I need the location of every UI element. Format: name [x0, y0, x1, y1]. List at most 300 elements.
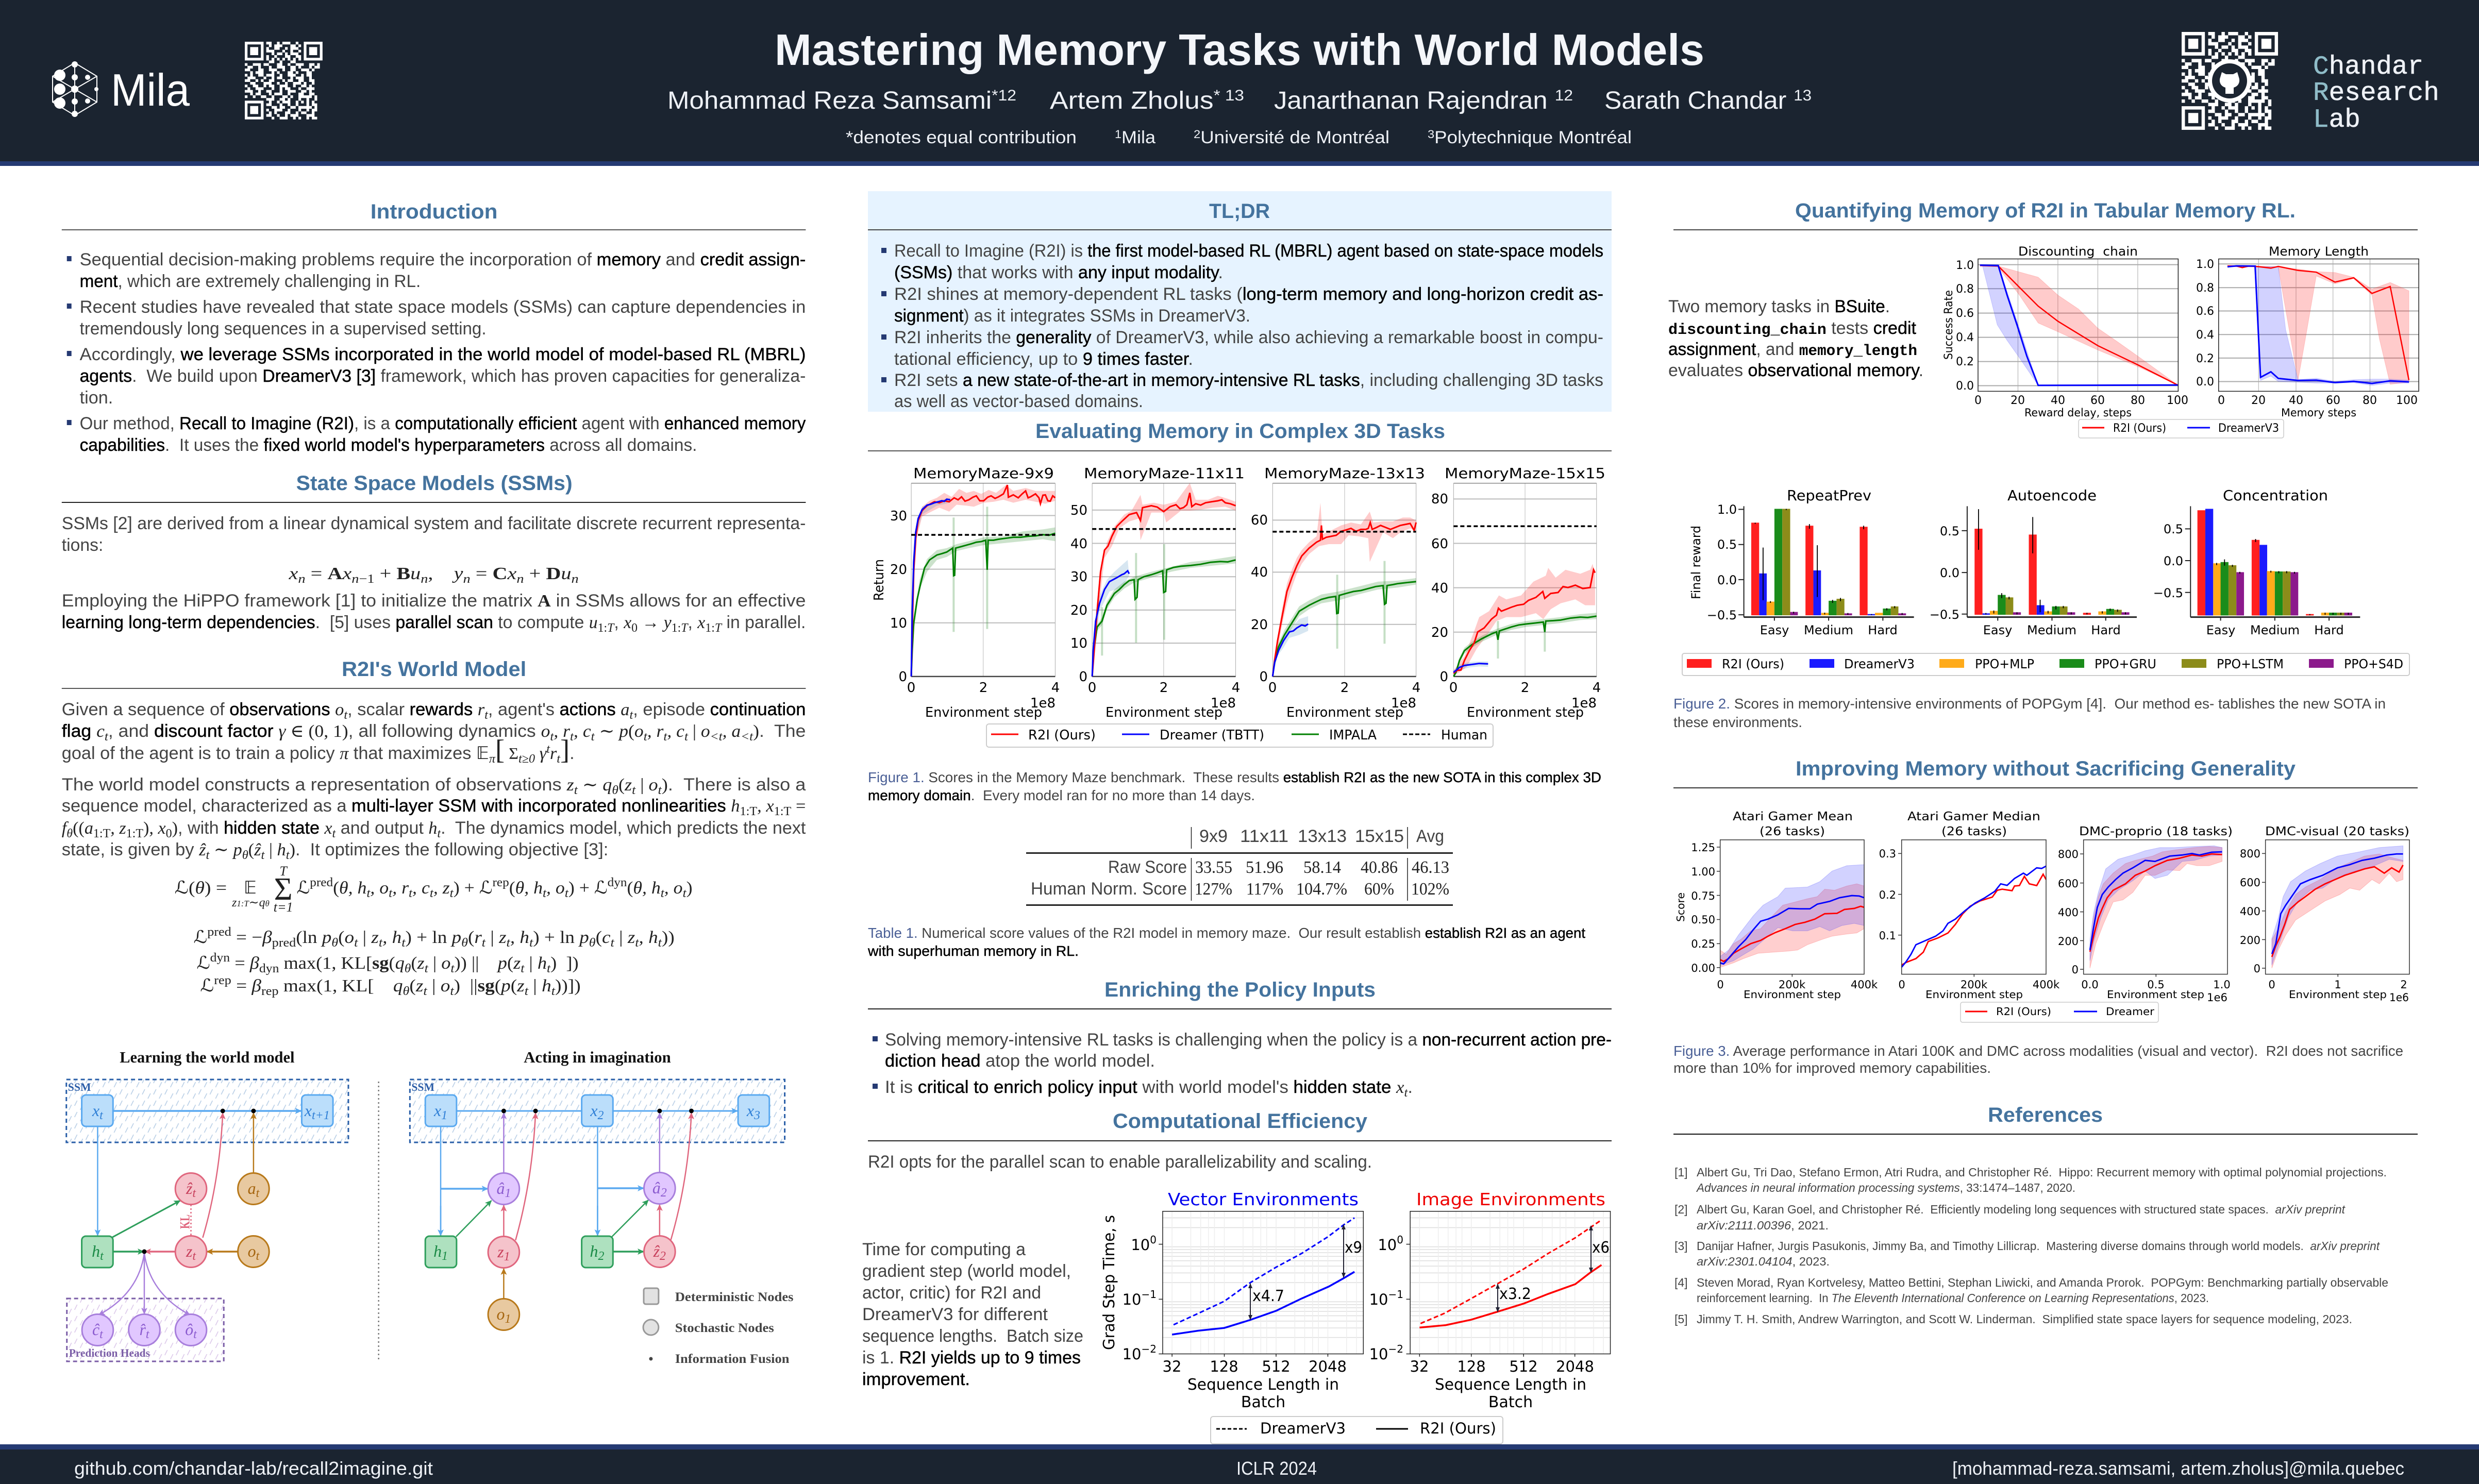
axis labels — [1674, 892, 2409, 1004]
reference list: [5] — [1674, 1312, 1688, 1326]
node labels: 1 — [505, 1187, 511, 1200]
equation: loss terms: t — [507, 936, 511, 950]
tick labels: 200 — [2240, 934, 2260, 947]
authors: *12 — [992, 87, 1016, 104]
equation: objective: t — [430, 887, 434, 900]
text: definitions: t — [550, 730, 555, 744]
tick labels: 10 — [1131, 1236, 1150, 1254]
tick labels: 0 — [2218, 394, 2225, 407]
equation: loss terms: ) ]) — [550, 954, 579, 973]
tick labels: 0.4 — [2196, 329, 2214, 342]
tick labels: 0 — [1449, 680, 1458, 696]
equation: objective: t — [409, 887, 413, 900]
intro sentence: R2I opts for the parallel scan to enable parallelizability and scaling. — [868, 1152, 1372, 1172]
tick labels: 0 — [898, 669, 907, 685]
table: scores: 102% — [1411, 880, 1449, 899]
equation: loss terms: t — [450, 985, 455, 998]
text: definitions: ) — [289, 840, 295, 859]
tick labels: Easy — [1983, 623, 2012, 637]
axis labels: 1e6 — [2389, 991, 2409, 1004]
tick labels: 400k — [2033, 979, 2060, 991]
tick labels: 2 — [1160, 680, 1168, 696]
bullet list: ment, which are extremely challenging in RL. — [80, 272, 421, 291]
tick labels: 32 — [1410, 1358, 1429, 1375]
node labels: t — [256, 1187, 260, 1200]
text: definitions: h — [277, 840, 286, 859]
legend: Dreamer — [2106, 1005, 2155, 1018]
tick labels: 80 — [2363, 394, 2377, 407]
text: definitions: h — [428, 819, 437, 838]
caption: figure 3: Figure 3. Average performance in Atari 100K and DMC across modalities (visual and vector). R2I does not sacrifice — [1673, 1043, 2403, 1059]
RepeatPrev bars — [1751, 509, 1906, 615]
tick labels: 30 — [890, 509, 907, 524]
axis labels: Environment step — [1286, 705, 1403, 720]
node labels: 2 — [598, 1109, 604, 1122]
tick labels: Hard — [2314, 623, 2344, 637]
text: definitions: t — [332, 827, 337, 840]
nodes: latent z — [175, 1173, 675, 1268]
text: SSM description: n — [298, 572, 306, 586]
table: scores — [1026, 827, 1453, 906]
axis labels: Return — [872, 559, 887, 601]
reference list: Albert Gu, Karan Goel, and Christopher Ré. Efficiently modeling long sequences with structured state spaces. arXiv preprint — [1697, 1203, 2346, 1216]
tick labels: −1 — [1388, 1288, 1403, 1301]
legend: Human — [1441, 728, 1487, 743]
equation: loss terms: o — [441, 954, 450, 973]
equation: objective: t — [683, 887, 687, 900]
tick labels: 60 — [1251, 513, 1268, 528]
text: memory tasks: assignment, and memory_length — [1668, 340, 1917, 360]
prediction heads region: Prediction Heads — [69, 1346, 150, 1359]
equation: loss terms: h — [538, 954, 547, 973]
text: definitions: t — [663, 730, 668, 744]
diagram title: acting: Acting in imagination — [524, 1048, 671, 1066]
heading: Improving Memory: Improving Memory without Sacrificing Generality — [1796, 757, 2296, 780]
tick labels: 0 — [907, 680, 915, 696]
equation: objective: t — [661, 887, 665, 900]
tick labels: 50 — [1070, 503, 1087, 518]
legend: R2I (Ours) — [2113, 422, 2166, 435]
chart titles: Atari Gamer Mean — [1733, 810, 1853, 823]
bullet list: Recall to Imagine (R2I) is the first model-based RL (MBRL) agent based on state-space models — [894, 241, 1603, 261]
authors: 12 — [1555, 87, 1573, 104]
equation: objective: 𝔼 — [244, 878, 257, 898]
equation: loss terms: max(1, KL[ — [279, 954, 372, 973]
tick labels: 0.25 — [1691, 938, 1715, 950]
node labels: t — [192, 1250, 196, 1263]
bullet list: agents. We build upon DreamerV3 [3] framework, which has proven capacities for generaliza- — [80, 366, 806, 386]
tick labels: 1e8 — [1391, 696, 1416, 711]
tick labels: 0.0 — [1717, 573, 1737, 587]
node labels: t — [100, 1250, 104, 1263]
node labels: 2 — [598, 1250, 604, 1263]
equation: loss terms: t — [529, 936, 534, 950]
axis labels: Sequence Length in — [1187, 1376, 1339, 1394]
tick labels: Easy — [1760, 623, 1789, 637]
equation: loss terms: ( — [411, 954, 417, 973]
tick labels: 10 — [890, 616, 907, 631]
text: definitions: , c — [667, 722, 684, 741]
equation: loss terms: ) || — [454, 976, 478, 996]
difference labels: x3.2 — [1499, 1285, 1531, 1303]
text: definitions: . The — [759, 721, 803, 741]
tick labels: 1.25 — [1691, 841, 1715, 854]
axis labels: 1e6 — [2207, 991, 2227, 1004]
text: definitions: t — [437, 827, 441, 840]
nodes: inputs — [238, 1173, 520, 1330]
equation: loss terms: t — [425, 962, 429, 975]
bullet list: R2I sets a new state-of-the-art in memory-intensive RL tasks, including challenging 3D tasks — [894, 370, 1603, 390]
tick labels: 600 — [2058, 878, 2079, 890]
text: definitions: θ — [66, 827, 73, 840]
node labels: t+1 — [312, 1109, 330, 1122]
legend: PPO+LSTM — [2217, 656, 2284, 671]
footer: venue: ICLR 2024 — [1236, 1458, 1317, 1479]
plotted lines and axes — [1717, 840, 2409, 977]
tick labels: 2 — [2400, 979, 2407, 991]
node labels: x — [590, 1102, 598, 1120]
equation: loss terms: t — [635, 936, 640, 950]
text: definitions: t — [105, 730, 109, 744]
chart titles: RepeatPrev — [1787, 487, 1871, 504]
caption: figure 1: Figure 1. Scores in the Memory Maze benchmark. These results establish R2I as the new SOTA in this complex 3D — [868, 769, 1601, 785]
node labels: z — [497, 1243, 504, 1261]
chart titles — [1787, 487, 2328, 504]
text: definitions: γ — [535, 744, 547, 763]
tick labels: 40 — [1431, 581, 1448, 596]
legend — [986, 724, 1493, 747]
node labels: t — [146, 1328, 150, 1341]
text: definitions: , x — [149, 819, 166, 838]
tick labels: 0 — [1397, 1234, 1403, 1246]
text: SSM description: −1 — [359, 572, 375, 586]
tick labels: 20 — [1431, 625, 1448, 640]
equation: objective: dyn — [608, 876, 627, 889]
text: definitions: θ — [242, 849, 248, 862]
equation: loss terms — [193, 925, 675, 998]
axis labels — [1100, 1215, 1586, 1411]
panel: R2I world model — [62, 658, 806, 998]
text: SSM description: , — [688, 613, 697, 632]
bullet list: as well as vector-based domains. — [894, 392, 1143, 411]
equation: loss terms: ( — [338, 928, 345, 947]
node labels: t — [193, 1328, 197, 1341]
bullet list — [67, 250, 806, 455]
equation: objective: Σ — [274, 872, 293, 907]
text: gradient step: is 1. R2I yields up to 9 times — [862, 1348, 1081, 1368]
plotted lines and axes — [1978, 259, 2419, 391]
panel: enriching policy inputs — [868, 979, 1612, 1100]
tick labels: 0.8 — [1956, 283, 1974, 296]
diagram legend: Deterministic Nodes — [675, 1290, 794, 1304]
text: definitions: rewards r — [410, 700, 484, 719]
equation: loss terms: z — [416, 954, 425, 973]
caption: figure 2 — [1673, 696, 2386, 730]
equation: loss terms: (ln — [296, 928, 322, 947]
text: SSM description: Du — [546, 564, 569, 583]
equation: loss terms: )) — [662, 928, 675, 947]
logo: Mila — [53, 61, 190, 117]
lines — [911, 533, 1597, 677]
heading: Enriching the Policy Inputs: Enriching the Policy Inputs — [1104, 979, 1376, 1001]
equation: loss terms: z — [415, 976, 423, 996]
text: definitions: [ — [495, 734, 505, 765]
tick labels: 0.0 — [1940, 566, 1959, 580]
text: definitions: t — [658, 784, 662, 797]
heading: Evaluating Memory: Evaluating Memory in Complex 3D Tasks — [1035, 420, 1445, 443]
equation: loss terms: h — [542, 976, 551, 996]
text: definitions: continuation — [710, 700, 806, 719]
equation: loss terms: p — [578, 928, 589, 947]
equation: loss terms: p — [450, 928, 461, 947]
table: scores: 46.13 — [1412, 858, 1449, 877]
chart titles: Image Environments — [1416, 1189, 1605, 1209]
axis labels: Environment step — [1105, 705, 1222, 720]
logo: Mila: Mila — [111, 64, 190, 115]
y axis label: Final reward — [1689, 526, 1703, 599]
header band — [0, 0, 2479, 166]
bullet list: capabilities. It uses the fixed world model's hyperparameters across all domains. — [80, 435, 697, 455]
bullet list: Our method, Recall to Imagine (R2I), is a computationally efficient agent with enhanced memory — [80, 414, 806, 433]
text: memory tasks: evaluates observational memory. — [1668, 361, 1923, 380]
equation: objective: T — [279, 864, 288, 879]
equation: loss terms: t — [525, 985, 529, 998]
tick labels — [890, 492, 1601, 711]
equation: loss terms: c — [602, 928, 611, 947]
panel: TL;DR — [868, 191, 1612, 412]
text: SSM description — [62, 514, 806, 635]
text: definitions: ∼ — [595, 722, 619, 741]
chart titles: Discounting chain — [2018, 244, 2138, 259]
tick labels: 0 — [1150, 1234, 1157, 1246]
tick labels: 1.00 — [1691, 866, 1715, 878]
tick labels: 0 — [1259, 669, 1268, 685]
text: definitions: ( — [618, 775, 625, 795]
node labels: 1 — [505, 1312, 511, 1326]
nodes: deterministic x — [82, 1095, 769, 1126]
tick labels: 800 — [2058, 848, 2079, 861]
equation: objective: θ, h — [633, 879, 661, 898]
chart titles: Autoencode — [2007, 487, 2097, 504]
affiliations: Université de Montréal — [1200, 128, 1389, 147]
axis labels: Environment step — [1744, 988, 1841, 1001]
SSM region left: SSM — [68, 1081, 91, 1093]
node labels: o — [496, 1305, 505, 1323]
tick labels: 0 — [2268, 979, 2275, 991]
text: definitions: , z — [110, 819, 126, 838]
equation: objective: t — [366, 887, 371, 900]
tick labels: 100 — [2396, 394, 2418, 407]
nodes: deterministic h — [82, 1236, 613, 1268]
affiliations — [846, 128, 1632, 147]
text: SSM description: x — [623, 613, 631, 632]
tick labels: 10 — [1369, 1345, 1388, 1363]
diagram title: learning: Learning the world model — [120, 1048, 295, 1066]
reference list: [4] — [1674, 1276, 1688, 1289]
QR code right with GitHub mark — [2182, 32, 2278, 130]
tick labels: 0.5 — [1940, 524, 1959, 538]
tick labels: 0 — [1717, 979, 1724, 991]
equation: loss terms: t — [450, 962, 455, 975]
chart titles: MemoryMaze-13x13 — [1264, 465, 1425, 482]
text: definitions: ∼ — [578, 775, 602, 795]
text: gradient step: improvement. — [862, 1370, 970, 1389]
chart titles: (26 tasks) — [1941, 825, 2007, 838]
axis labels: Memory steps — [2281, 407, 2356, 419]
tick labels: 2 — [979, 680, 987, 696]
text: definitions: t — [206, 849, 210, 862]
table: scores: 11x11 — [1240, 827, 1288, 846]
text: SSM description: n — [463, 572, 471, 586]
caption: figure 1: memory domain. Every model ran for no more than 14 days. — [868, 787, 1255, 803]
text: definitions: , a — [723, 722, 741, 741]
reference list: arXiv:2111.00396 , 2021. — [1697, 1219, 1829, 1232]
text: definitions: t — [630, 709, 634, 722]
reference list: reinforcement learning. In The Eleventh International Conference on Learning Representations, 2023. — [1697, 1291, 2209, 1305]
tick labels: 80 — [1431, 492, 1448, 507]
table: scores: 15x15 — [1355, 827, 1404, 846]
tick labels: 2048 — [1556, 1358, 1594, 1375]
text: definitions — [62, 700, 806, 862]
caption: figure 1 — [868, 769, 1601, 803]
SSM region right: SSM — [411, 1081, 434, 1093]
tick labels: 512 — [1509, 1358, 1538, 1375]
text: definitions: , scalar — [347, 700, 410, 719]
panel: quantifying memory — [1668, 199, 2419, 438]
text: SSM description: 1:T — [705, 621, 722, 635]
text: definitions: t — [632, 784, 636, 797]
node labels: 3 — [753, 1109, 760, 1122]
tick labels: 20 — [2011, 394, 2025, 407]
diagram legend — [643, 1288, 794, 1366]
affiliations: 2 — [1194, 128, 1200, 141]
text: definitions: flag c — [62, 721, 104, 741]
equation: loss terms: ( — [409, 976, 416, 996]
tick labels: 1e8 — [1030, 696, 1056, 711]
tick labels: 0 — [2254, 963, 2260, 975]
tick labels: 0.0 — [2081, 979, 2099, 991]
equation: loss terms: θ — [589, 936, 596, 950]
equation: objective: , z — [433, 879, 450, 898]
tick labels: 0.2 — [1879, 889, 1896, 901]
text: definitions: t — [684, 730, 689, 744]
tick labels: 0.2 — [2196, 352, 2214, 365]
tick labels: −1 — [1142, 1288, 1157, 1301]
text: definitions: t≥0 — [518, 752, 535, 766]
text: SSM description: n — [571, 572, 579, 586]
arrows: learning graph — [97, 1111, 301, 1315]
equation: loss terms: t — [611, 936, 615, 950]
tick labels: 1e8 — [1571, 696, 1597, 711]
text: definitions: 1:T — [93, 827, 111, 840]
reference list: [2] — [1674, 1203, 1688, 1216]
axis labels — [1942, 290, 2356, 419]
SSM region left — [66, 1080, 348, 1142]
text: definitions: ) — [172, 819, 178, 838]
legend: IMPALA — [1329, 728, 1377, 743]
tick labels: Medium — [1804, 623, 1853, 637]
tick labels: 0.0 — [2196, 376, 2214, 389]
reference list: Jimmy T. H. Smith, Andrew Warrington, and Scott W. Linderman. Simplified state space layers for sequence modeling, 2023. — [1697, 1312, 2352, 1326]
bullet list: Sequential decision-making problems require the incorporation of memory and credit assign- — [80, 250, 806, 269]
tick labels: 0.4 — [1956, 331, 1974, 344]
tick labels: 0 — [1898, 979, 1905, 991]
equation: loss terms: θ — [331, 936, 338, 950]
heading: R2I's World Model: R2I's World Model — [342, 658, 526, 681]
bars and axes — [1738, 506, 2360, 620]
tick labels: 512 — [1262, 1358, 1291, 1375]
text: SSM description: x — [697, 613, 705, 632]
reference list — [1674, 1166, 2388, 1326]
text: definitions: = — [791, 797, 806, 816]
node labels: z — [186, 1242, 192, 1260]
node labels: t — [99, 1328, 104, 1341]
node labels: t — [99, 1109, 104, 1122]
text: definitions: 1:T — [126, 827, 143, 840]
heading: References: References — [1988, 1104, 2103, 1126]
text: gradient step — [862, 1240, 1083, 1389]
text: definitions: t — [591, 730, 595, 744]
legend: R2I (Ours) — [1996, 1005, 2051, 1018]
equation: loss terms: t — [423, 985, 428, 998]
text: definitions: a — [85, 819, 93, 838]
equation: loss terms: dyn — [210, 951, 230, 965]
equation: objective: , o — [370, 879, 389, 898]
tick labels: 0.50 — [1691, 914, 1715, 926]
equation: loss terms: θ — [405, 962, 411, 975]
text: SSM description: Ax — [327, 564, 350, 583]
diagram legend: Stochastic Nodes — [675, 1321, 774, 1335]
text: definitions: The world model constructs a representation of observations z — [62, 775, 574, 795]
tick labels: 2 — [1521, 680, 1529, 696]
caption: figure 3 — [1673, 1043, 2403, 1076]
legend — [1682, 653, 2409, 676]
separator — [378, 1082, 379, 1361]
node labels: 1 — [442, 1250, 448, 1263]
text: definitions: <t — [741, 730, 754, 744]
caption: table 1: with superhuman memory in RL. — [867, 943, 1079, 959]
equation: loss terms: rep — [261, 985, 279, 998]
equation: loss terms: sg(q — [372, 954, 404, 973]
equation: loss terms: | — [524, 954, 538, 973]
chart titles: MemoryMaze-11x11 — [1084, 465, 1245, 482]
text: definitions: Σ — [505, 745, 518, 763]
equation: loss terms: ( — [596, 928, 602, 947]
equation: loss terms: t — [379, 936, 383, 950]
tick labels: 600 — [2240, 876, 2260, 889]
text: SSM description: → — [638, 613, 664, 632]
text: SSM description: n — [516, 572, 524, 586]
axis labels: Reward delay, steps — [2024, 407, 2132, 419]
QR code left — [245, 42, 323, 120]
axis labels: Score — [1674, 892, 1687, 922]
tick labels: 80 — [2131, 394, 2145, 407]
axis labels: Environment step — [925, 705, 1042, 720]
caption: table 1 — [867, 925, 1585, 959]
text: definitions: state, is given by ẑ — [62, 840, 206, 859]
text: SSM description: , — [428, 564, 454, 583]
tick labels: 1e8 — [1211, 696, 1236, 711]
text: SSM description: Cx — [492, 564, 515, 583]
tick labels: 0.0 — [1956, 380, 1974, 393]
chart titles: DMC-proprio (18 tasks) — [2079, 825, 2233, 838]
equation: objective: t — [389, 887, 393, 900]
tick labels: −0.5 — [1930, 608, 1959, 622]
panel: references — [1673, 1104, 2418, 1326]
tick labels: 200k — [1779, 979, 1806, 991]
heading: Computational Efficiency: Computational Efficiency — [1113, 1110, 1368, 1133]
tick labels: 10 — [1123, 1345, 1142, 1363]
